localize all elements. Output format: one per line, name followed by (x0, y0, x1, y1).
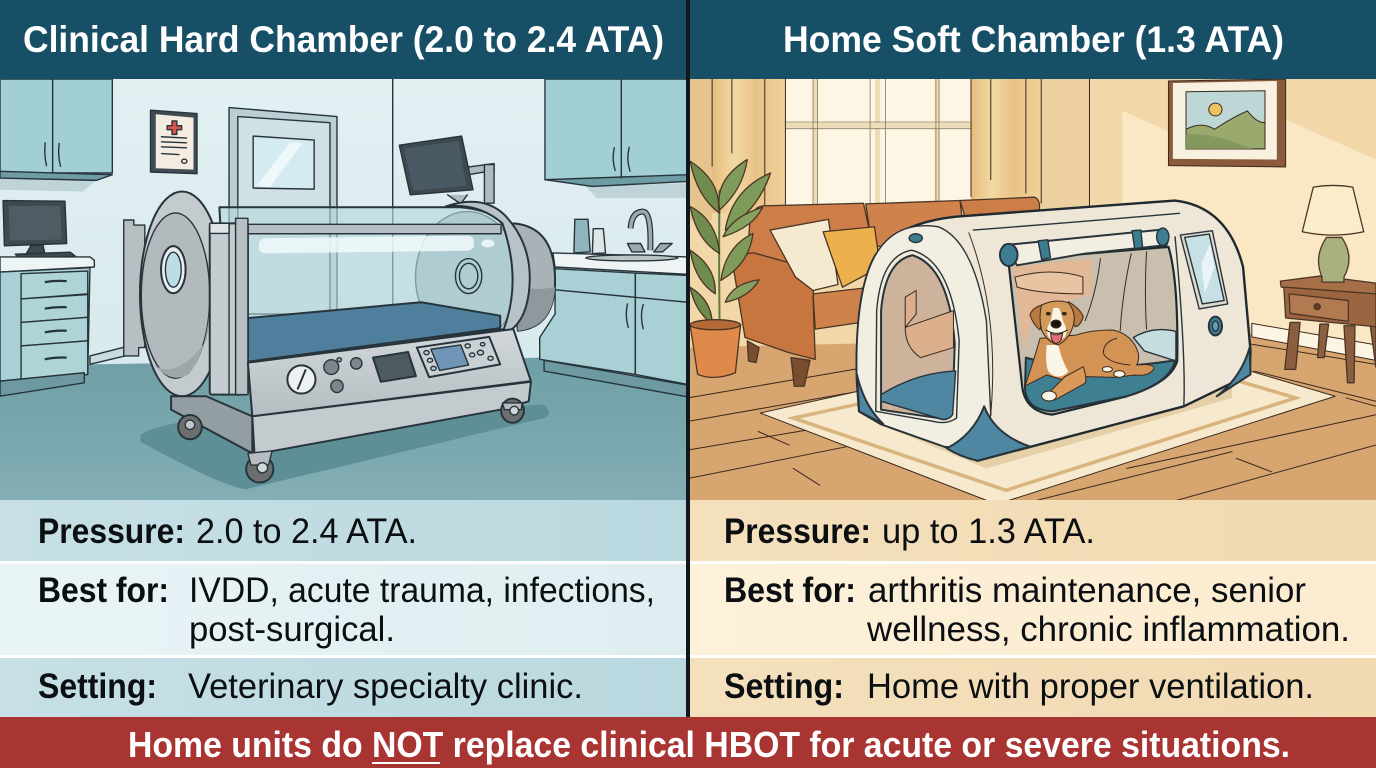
dog lying on mat (1025, 301, 1154, 401)
hard chamber (124, 191, 555, 483)
chamber end cap and ring (513, 223, 555, 331)
front ring (857, 226, 991, 448)
upper left cabinet (0, 79, 112, 191)
info row: setting: Setting: (724, 667, 844, 706)
info row: setting (0, 655, 687, 717)
floor shadow (140, 405, 549, 489)
header: clinical hard chamber: Clinical Hard Chamber (2.0 to 2.4 ATA) (23, 19, 664, 60)
illustration: veterinary clinic room with hard chamber (0, 79, 688, 502)
info row: best for: post-surgical. (189, 610, 395, 649)
info row: best for: Best for: (724, 571, 856, 610)
window (785, 79, 971, 207)
warning banner: Home units do NOT replace clinical HBOT for acute or severe situations. (128, 724, 1290, 765)
framed certificate (151, 110, 197, 174)
info row: pressure: Pressure: (38, 512, 185, 551)
info row: setting: Home with proper ventilation. (867, 667, 1314, 706)
info row: best for (690, 561, 1376, 655)
info row: pressure: up to 1.3 ATA. (882, 512, 1095, 551)
info row: best for: Best for: (38, 571, 169, 610)
soft chamber (857, 201, 1251, 461)
info row: pressure (0, 500, 687, 561)
panel: clinical hard chamber (0, 0, 688, 717)
chamber shell (857, 201, 1251, 461)
left hinge bar (124, 220, 145, 356)
header: home soft chamber: Home Soft Chamber (1.3 ATA) (783, 19, 1284, 60)
rug (760, 371, 1336, 500)
illustration: living room with soft chamber (688, 79, 1376, 502)
side door opening (1008, 247, 1177, 415)
framed landscape picture (1168, 79, 1286, 167)
potted plant (690, 160, 770, 377)
wall monitor on arm (399, 136, 494, 204)
end window (876, 250, 959, 423)
info row: pressure: 2.0 to 2.4 ATA. (196, 512, 417, 551)
info row: pressure (690, 500, 1376, 561)
upper right cabinet (545, 79, 688, 198)
dog front leg (1042, 367, 1086, 401)
info row: best for (0, 561, 687, 655)
dog head (1030, 301, 1083, 345)
door with window (229, 108, 337, 314)
side table and lamp (1280, 185, 1376, 383)
lower right counter, bottles and sink (540, 212, 688, 397)
curtains (690, 79, 1041, 220)
front column (210, 218, 248, 395)
header: clinical hard chamber (0, 0, 687, 79)
lower left counter, computer and drawers (0, 201, 94, 396)
control base (171, 329, 531, 454)
small window and vents (909, 213, 1228, 415)
dog hind paws (1102, 367, 1125, 377)
wood floor (688, 323, 1376, 502)
rolled flap (1000, 228, 1169, 266)
blue base panels (857, 348, 1251, 461)
panel: home soft chamber (688, 0, 1376, 717)
dog body (1025, 330, 1154, 386)
info row: setting: Veterinary specialty clinic. (188, 667, 583, 706)
transparent acrylic tube (218, 200, 531, 346)
info row: best for: arthritis maintenance, senior (868, 571, 1306, 610)
info row: best for: IVDD, acute trauma, infections, (189, 571, 655, 610)
header: home soft chamber (688, 0, 1376, 79)
sofa (734, 197, 1040, 386)
info row: setting (690, 655, 1376, 717)
info row: best for: wellness, chronic inflammation. (866, 610, 1350, 649)
info row: setting: Setting: (38, 667, 157, 706)
front door disc (139, 190, 214, 396)
info row: pressure: Pressure: (724, 512, 871, 551)
casters (178, 399, 524, 483)
blue mattress (248, 302, 500, 362)
